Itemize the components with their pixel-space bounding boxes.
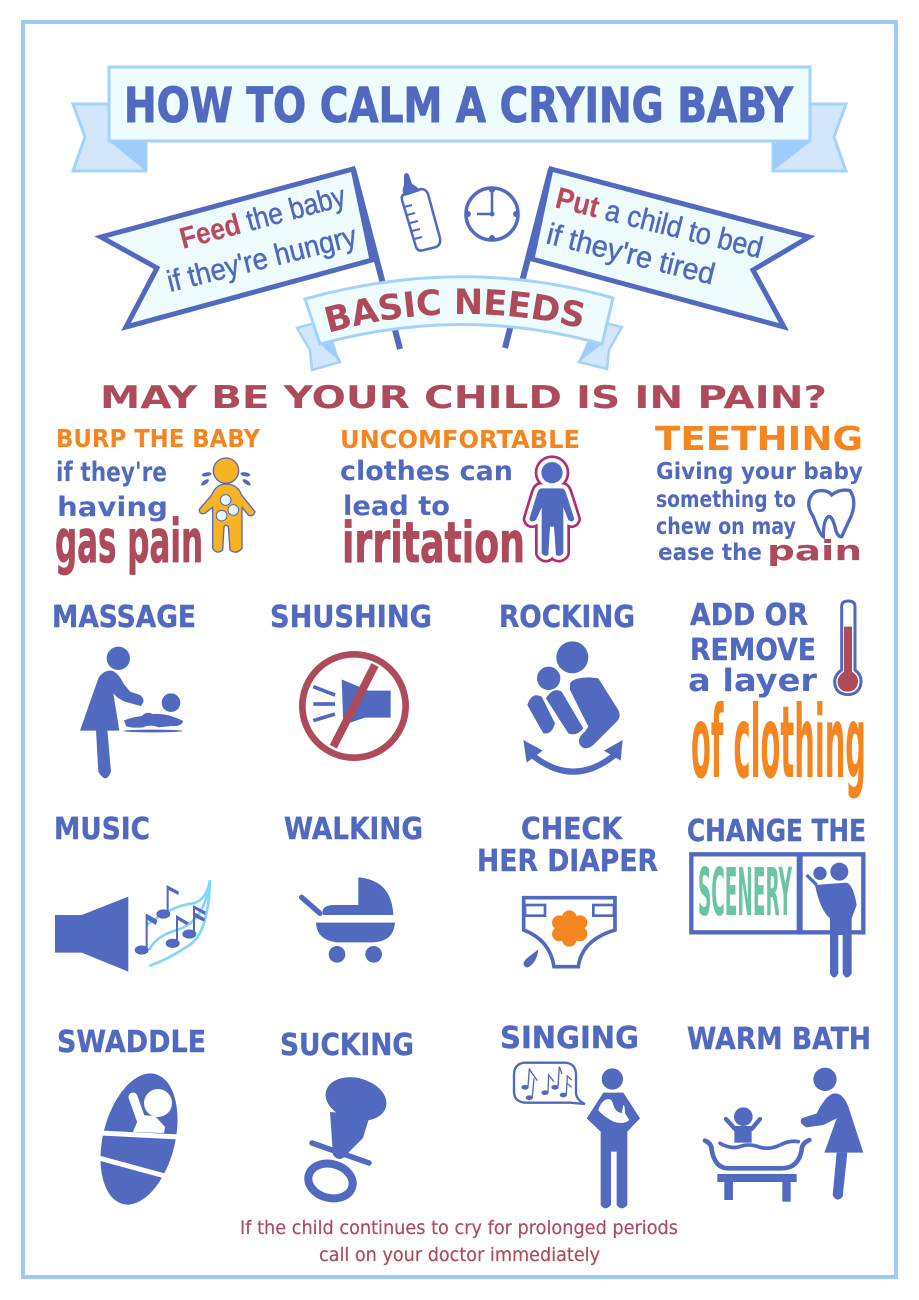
flag: put a child to bed	[505, 169, 809, 348]
heading: TEETHING	[655, 419, 863, 458]
label: change the scenery: CHANGE THE	[687, 814, 866, 849]
label: swaddle: SWADDLE	[57, 1025, 206, 1060]
title ribbon	[73, 67, 846, 171]
text block: chew on may	[656, 514, 796, 540]
ribbon band	[109, 67, 810, 141]
banner band	[305, 277, 613, 344]
label: check her diaper: HER DIAPER	[477, 844, 658, 879]
label: walking: WALKING	[284, 812, 423, 847]
flag text line 1: Feed the baby	[176, 180, 349, 256]
label: check her diaper	[477, 812, 658, 879]
text block	[656, 459, 863, 567]
icon: clock	[465, 187, 519, 241]
text block: having	[57, 492, 168, 523]
text block	[688, 598, 866, 801]
icon: music	[55, 880, 210, 972]
icon: pacifier	[304, 1071, 391, 1203]
text block	[55, 457, 203, 577]
text block: lead to	[343, 491, 450, 522]
label: massage: MASSAGE	[52, 600, 196, 635]
label: sucking: SUCKING	[280, 1028, 414, 1063]
label: rocking: ROCKING	[499, 600, 635, 635]
heading: in pain: MAY BE YOUR CHILD IS IN PAIN?	[100, 380, 827, 416]
flag text line 1: Put a child to bed	[552, 182, 766, 265]
banner text: BASIC NEEDS	[324, 288, 584, 332]
icon: thermometer	[835, 601, 861, 695]
text block: irritation	[342, 511, 525, 576]
text block: Giving your baby	[656, 459, 863, 485]
footer note: call on your doctor immediately	[319, 1244, 600, 1266]
label: singing: SINGING	[500, 1021, 639, 1056]
ribbon tail left	[73, 104, 146, 171]
icon: bath	[705, 1068, 863, 1202]
text block: a layer	[688, 663, 818, 699]
banner tails	[297, 322, 622, 370]
flag text line 2: if they're hungry	[164, 220, 360, 299]
text block: something to	[656, 487, 796, 513]
footer note	[240, 1217, 678, 1266]
footer note: If the child continues to cry for prolonged periods	[240, 1217, 678, 1239]
icon: rocking	[523, 641, 623, 772]
flag: feed the baby	[101, 169, 400, 349]
icon: massage	[80, 647, 183, 778]
icon: singing parent	[514, 1063, 640, 1208]
text block: REMOVE	[690, 633, 816, 668]
panel: burp	[55, 424, 261, 577]
icon: crying baby	[199, 458, 255, 552]
icon: child in clothes	[529, 462, 574, 556]
panel: uncomfortable	[340, 425, 580, 576]
icon: diaper	[523, 898, 615, 968]
flag text line 2: if they're tired	[543, 218, 718, 291]
text block: clothes can	[340, 456, 513, 487]
icon: stroller	[302, 877, 395, 963]
icon: no sound	[302, 654, 406, 758]
label: check her diaper: CHECK	[521, 812, 624, 847]
text block: pain	[767, 534, 862, 567]
panel: add or remove clothing	[688, 598, 866, 801]
speech bubble	[514, 1063, 585, 1104]
ribbon tail right	[773, 104, 846, 171]
icon: tooth	[809, 490, 854, 537]
icon: baby bottle	[402, 173, 440, 251]
text block: if they're	[56, 457, 167, 488]
text block	[340, 456, 525, 576]
icon: window and parent	[691, 854, 863, 977]
label: shushing: SHUSHING	[270, 600, 432, 635]
banner: basic needs	[295, 275, 624, 372]
text block: gas pain	[55, 507, 203, 577]
heading: BURP THE BABY	[56, 424, 261, 453]
label: warm bath: WARM BATH	[687, 1022, 871, 1057]
text block: ADD OR	[690, 598, 808, 633]
label: music: MUSIC	[54, 812, 150, 847]
text block: ease the	[658, 540, 762, 566]
panel: teething	[655, 419, 863, 567]
heading: UNCOMFORTABLE	[340, 425, 580, 454]
icon: swaddled baby	[88, 1065, 190, 1213]
